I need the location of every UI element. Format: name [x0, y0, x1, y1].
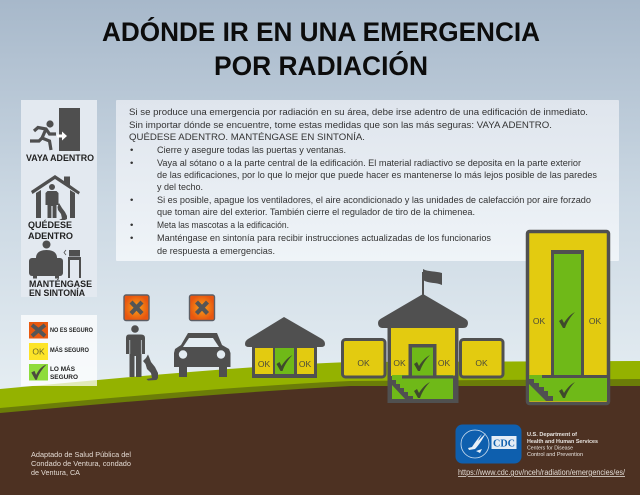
- bullet list: de las edificaciones, por lo que lo mejor que puede hacer es mantenerse lo más lejos posible de las paredes: [157, 170, 597, 181]
- OK labels and checks: [393, 355, 450, 398]
- icon: X badge car: [190, 295, 214, 320]
- stairs: [392, 380, 413, 400]
- right annex: [460, 340, 503, 377]
- bullet list: [130, 145, 597, 257]
- CDC logo: CDC: [493, 438, 515, 450]
- intro text: Si se produce una emergencia por radiación en su área, debe irse adentro de una edificación de inmediato.: [129, 107, 588, 118]
- medium building: [342, 269, 503, 403]
- bullet list: de respuesta a emergencias.: [157, 246, 275, 257]
- icon: not safe: [29, 322, 48, 338]
- bullet list: •: [130, 145, 133, 156]
- walls and rooms: [528, 232, 609, 404]
- credit text: Condado de Ventura, condado: [31, 459, 131, 468]
- credit text: Adaptado de Salud Pública del: [31, 450, 131, 459]
- agency text: Centers for Disease: [527, 446, 573, 452]
- label: manténgase en sintonía: EN SINTONÍA: [29, 288, 85, 299]
- icon: running into door: [30, 108, 80, 151]
- OK labels and checks: OK: [533, 316, 545, 326]
- label: safest: SEGURO: [50, 375, 78, 381]
- bullet list: Si es posible, apague los ventiladores, el aire acondicionado y las unidades de calefacción por aire forzado: [157, 195, 591, 206]
- icon: car: [174, 333, 230, 377]
- source URL: https://www.cdc.gov/nceh/radiation/emergencies/es/: [458, 468, 626, 477]
- credit text: de Ventura, CA: [31, 468, 81, 477]
- roof: [245, 317, 325, 347]
- OK labels and checks: OK: [393, 358, 406, 368]
- label: quédese adentro: [28, 220, 73, 242]
- bullet list: •: [130, 195, 133, 206]
- roof: [378, 294, 468, 328]
- tall building: [528, 232, 609, 404]
- walls and rooms: [252, 344, 317, 378]
- icon: person in armchair with radio: [29, 240, 81, 278]
- agency text: [527, 432, 598, 458]
- bullet list: Manténgase en sintonía para recibir instrucciones actualizadas de los funcionarios: [157, 233, 491, 244]
- panel: legend: [21, 315, 97, 386]
- OK labels and check: OK: [299, 359, 311, 369]
- car with X: [174, 295, 230, 377]
- title: ADÓNDE IR EN UNA EMERGENCIA: [102, 17, 540, 47]
- icon: safest: [29, 364, 48, 380]
- agency text: Control and Prevention: [527, 452, 583, 458]
- title: [102, 17, 540, 81]
- OK labels and checks: OK: [589, 316, 601, 326]
- CDC logo: [456, 424, 522, 464]
- OK labels and check: OK: [258, 359, 270, 369]
- label: quédese adentro: QUÉDESE: [28, 220, 72, 231]
- bullet list: Vaya al sótano o a la parte central de la edificación. El material radiactivo se deposita en la parte exterior: [157, 158, 582, 169]
- outdoors person with X: [124, 295, 158, 380]
- intro text: [129, 107, 588, 143]
- label: safest: LO MÁS: [50, 366, 75, 373]
- panel: actions: [21, 100, 97, 299]
- icon: X badge person: [124, 295, 149, 320]
- OK labels and checks: [533, 312, 601, 398]
- bullet list: •: [130, 233, 133, 244]
- OK labels and check: [258, 355, 311, 371]
- flag: [422, 269, 442, 296]
- intro text: Sin importar dónde se encuentre, tome estas medidas que son las más seguras: VAYA ADENTRO.: [129, 120, 552, 131]
- bullet list: •: [130, 220, 133, 231]
- stairs: [529, 379, 553, 401]
- right annex: OK: [475, 358, 488, 368]
- icon: safer: OK: [32, 346, 45, 356]
- bullet list: Cierre y asegure todas las puertas y ventanas.: [157, 145, 346, 156]
- label: manténgase en sintonía: MANTÉNGASE: [29, 279, 92, 290]
- credit text: [31, 450, 131, 477]
- icon: cat: [143, 354, 158, 380]
- label: not safe: NO ES SEGURO: [50, 328, 93, 334]
- icon: house with person and pet: [31, 175, 80, 220]
- left annex: OK: [357, 358, 370, 368]
- bullet list: que toman aire del exterior. También cierre el regulador de tiro de la chimenea.: [157, 207, 475, 218]
- title: POR RADIACIÓN: [214, 51, 428, 81]
- label: safest: [50, 366, 78, 381]
- icon: standing person: [126, 325, 145, 377]
- bullet list: Meta las mascotas a la edificación.: [157, 220, 289, 231]
- panel: instructions: [116, 100, 619, 261]
- label: manténgase en sintonía: [29, 279, 92, 299]
- main walls: [388, 325, 458, 403]
- label: quédese adentro: ADENTRO: [28, 231, 73, 242]
- agency text: Health and Human Services: [527, 439, 598, 445]
- intro text: QUÉDESE ADENTRO. MANTÉNGASE EN SINTONÍA.: [129, 132, 365, 143]
- agency text: U.S. Department of: [527, 432, 577, 438]
- ground: [0, 361, 640, 495]
- label: vaya adentro: VAYA ADENTRO: [26, 153, 94, 164]
- bullet list: •: [130, 158, 133, 169]
- label: safer: MÁS SEGURO: [50, 347, 89, 354]
- OK labels and checks: OK: [438, 358, 450, 368]
- left annex: [342, 340, 385, 377]
- bullet list: y del techo.: [157, 182, 203, 193]
- small house: [245, 317, 325, 378]
